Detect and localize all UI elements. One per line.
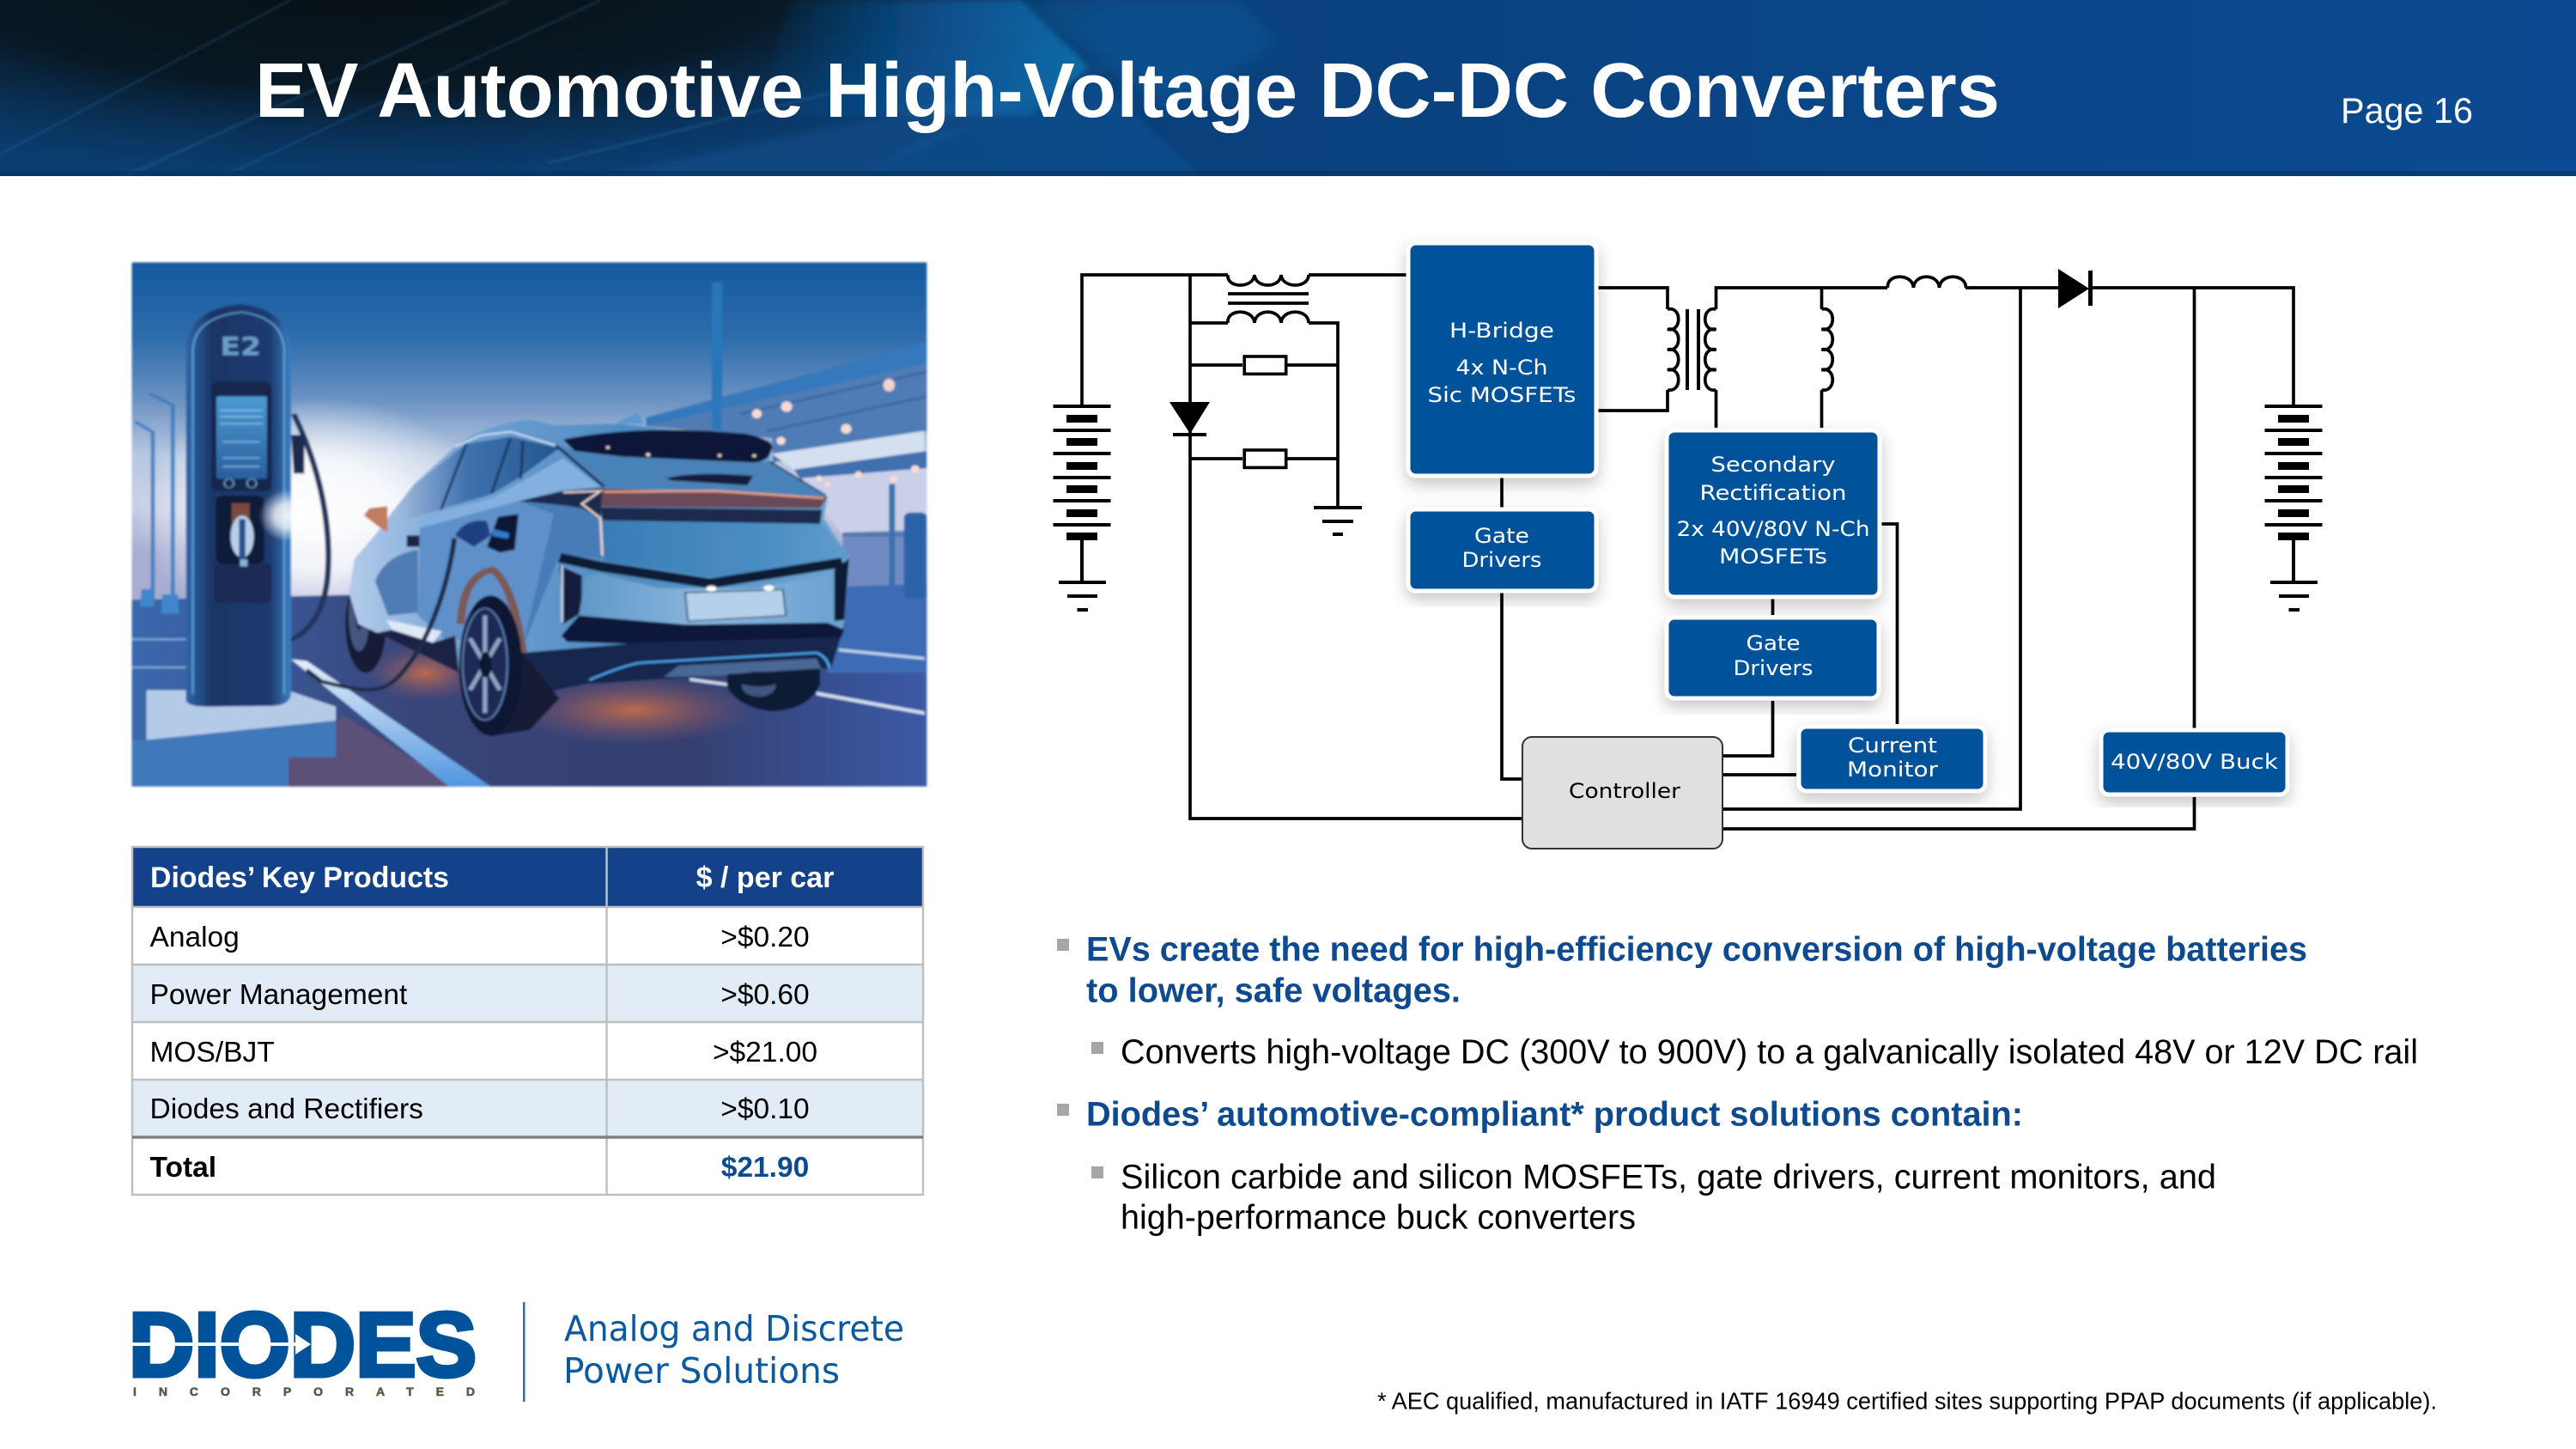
row: Power Management: >$0.60 bbox=[720, 979, 810, 1011]
block: controller: Controller bbox=[1569, 779, 1680, 803]
page number: Page 16 bbox=[2341, 90, 2473, 131]
charger connector bbox=[214, 563, 271, 603]
sub-bullet: silicon carbide bbox=[1091, 1158, 2216, 1237]
door panels bbox=[417, 502, 526, 641]
sub-bullet: converts high-voltage DC: Converts high-voltage DC (300V to 900V) to a galvanically isolated 48V or 12V DC rail bbox=[1121, 1033, 2418, 1071]
block: current monitor: Current bbox=[1848, 734, 1937, 758]
spoiler fin bbox=[616, 411, 643, 423]
block: controller bbox=[1522, 737, 1722, 849]
sub-bullet: silicon carbide: Silicon carbide and silicon MOSFETs, gate drivers, current monitors, and bbox=[1121, 1158, 2216, 1196]
background canopy upper section bbox=[646, 283, 927, 463]
tagline: Power Solutions bbox=[563, 1350, 840, 1391]
block: secondary rectification bbox=[1667, 430, 1880, 597]
left parking lines bbox=[131, 638, 190, 668]
icon: isolation transformer bbox=[1668, 309, 1716, 390]
block: gate drivers (secondary) bbox=[1667, 618, 1879, 698]
block: gate drivers (primary) bbox=[1408, 509, 1596, 591]
row: Diodes and Rectifiers: Diodes and Rectifiers bbox=[149, 1093, 423, 1125]
car near wheel bbox=[459, 569, 560, 736]
wires bbox=[1082, 275, 2293, 829]
spoiler bbox=[563, 429, 773, 462]
horizon glow bbox=[155, 400, 449, 598]
icon: resistors bbox=[1244, 356, 1286, 467]
row: Analog bbox=[149, 922, 810, 953]
rear glass bbox=[556, 445, 826, 496]
table header row bbox=[131, 847, 923, 907]
charger body bbox=[186, 304, 291, 707]
car far rear wheel bbox=[727, 668, 820, 711]
block: H-Bridge: Sic MOSFETs bbox=[1427, 383, 1577, 407]
table: Diodes' key products bbox=[131, 847, 923, 1195]
block: H-Bridge: H-Bridge bbox=[1449, 319, 1554, 343]
row: Total: Total bbox=[149, 1152, 216, 1184]
title: EV Automotive High-Voltage DC-DC Converters bbox=[255, 48, 2000, 134]
table header row: $ / per car bbox=[696, 861, 834, 894]
sky background bbox=[131, 261, 929, 601]
holster cable bbox=[290, 412, 333, 642]
photo: electric car at charging station bbox=[131, 263, 927, 787]
block: H-Bridge bbox=[1408, 243, 1596, 476]
row: Diodes and Rectifiers: >$0.10 bbox=[720, 1093, 810, 1125]
block: gate drivers (secondary): Gate bbox=[1747, 631, 1800, 655]
left lamp posts bbox=[135, 393, 173, 603]
rear waist band bbox=[560, 557, 842, 583]
licence plate bbox=[685, 590, 786, 621]
block: gate drivers (primary): Drivers bbox=[1461, 548, 1542, 572]
pavement stripe bbox=[289, 715, 457, 787]
charger screen bbox=[212, 381, 271, 491]
row: Total bbox=[149, 1152, 809, 1184]
sub-bullet: silicon carbide: high-performance buck converters bbox=[1121, 1199, 1636, 1237]
circuit diagram bbox=[1053, 243, 2322, 849]
row: Analog: Analog bbox=[149, 922, 240, 953]
logo: Diodes Incorporated: INCORPORATED bbox=[133, 1385, 475, 1398]
bullet: product solutions: Diodes’ automotive-compliant* product solutions contain: bbox=[1086, 1096, 2023, 1134]
icon: output inductor bbox=[1887, 277, 1966, 288]
icon: output diode bbox=[2058, 269, 2093, 308]
bullet: EVs create the need bbox=[1057, 931, 2307, 1010]
row: Analog: >$0.20 bbox=[720, 922, 810, 953]
roof highlight bbox=[455, 432, 557, 447]
icon: input diode bbox=[1170, 402, 1210, 436]
tailgate panel bbox=[602, 521, 850, 577]
table row stripes bbox=[131, 965, 923, 1137]
background canopy bbox=[712, 387, 927, 673]
lower rear panel bbox=[579, 574, 833, 624]
icon: input filter inductors bbox=[1228, 275, 1309, 323]
car far front wheel bbox=[344, 595, 386, 673]
side windows bbox=[392, 436, 560, 518]
lens flare bbox=[258, 490, 293, 541]
row: Power Management: Power Management bbox=[149, 979, 408, 1011]
block: secondary rectification: Rectification bbox=[1700, 481, 1846, 505]
shoulder highlight bbox=[445, 458, 601, 519]
row: Power Management bbox=[149, 979, 810, 1011]
divider line bbox=[523, 1302, 526, 1402]
side mirror bbox=[364, 506, 387, 533]
block: H-Bridge: 4x N-Ch bbox=[1456, 356, 1547, 380]
icon: ground symbol bbox=[1314, 506, 1362, 536]
charge port bbox=[487, 514, 519, 552]
tagline: Analog and Discrete bbox=[564, 1308, 904, 1349]
icon: right battery bbox=[2265, 405, 2322, 612]
table header row: Diodes’ Key Products bbox=[150, 861, 449, 894]
row: MOS/BJT: MOS/BJT bbox=[149, 1037, 275, 1068]
logo: Diodes Incorporated: DIODES bbox=[129, 1294, 477, 1396]
row: MOS/BJT: >$21.00 bbox=[713, 1037, 817, 1068]
row: Total: $21.90 bbox=[721, 1152, 809, 1184]
side vent bbox=[560, 565, 582, 624]
charger base plinth bbox=[147, 691, 336, 740]
pavement markings and reflections bbox=[536, 679, 753, 740]
charging plug and cable bbox=[307, 521, 490, 690]
block: current monitor: Monitor bbox=[1847, 758, 1938, 782]
row: MOS/BJT bbox=[149, 1037, 817, 1068]
charger logo: E2 bbox=[220, 332, 261, 361]
bullet list bbox=[1057, 931, 2418, 1237]
block: buck converter: 40V/80V Buck bbox=[2111, 750, 2278, 774]
block: buck converter bbox=[2101, 730, 2287, 795]
footnote: * AEC qualified, manufactured in IATF 16949 certified sites supporting PPAP documents (if applicable). bbox=[1377, 1388, 2437, 1414]
header banner bbox=[0, 0, 2576, 176]
tagline bbox=[563, 1308, 904, 1391]
block: gate drivers (primary): Gate bbox=[1474, 524, 1529, 548]
icon: secondary centre-tap inductor bbox=[1822, 309, 1832, 390]
block: secondary rectification: Secondary bbox=[1710, 453, 1836, 477]
icon: left battery bbox=[1053, 405, 1111, 612]
bullet: EVs create the need: EVs create the need for high-efficiency conversion of high-voltage batteries bbox=[1086, 931, 2307, 969]
bullet: EVs create the need: to lower, safe voltages. bbox=[1086, 972, 1461, 1010]
tail light bar bbox=[600, 488, 828, 508]
wiper bbox=[665, 474, 753, 485]
block: secondary rectification: MOSFETs bbox=[1719, 545, 1827, 569]
row: Diodes and Rectifiers bbox=[149, 1093, 810, 1125]
ground bbox=[131, 582, 927, 787]
block: current monitor bbox=[1799, 727, 1985, 791]
block: secondary rectification: 2x 40V/80V N-Ch bbox=[1676, 517, 1870, 541]
rear bumper bbox=[562, 616, 844, 644]
car body bbox=[349, 419, 850, 694]
block: gate drivers (secondary): Drivers bbox=[1733, 656, 1814, 680]
